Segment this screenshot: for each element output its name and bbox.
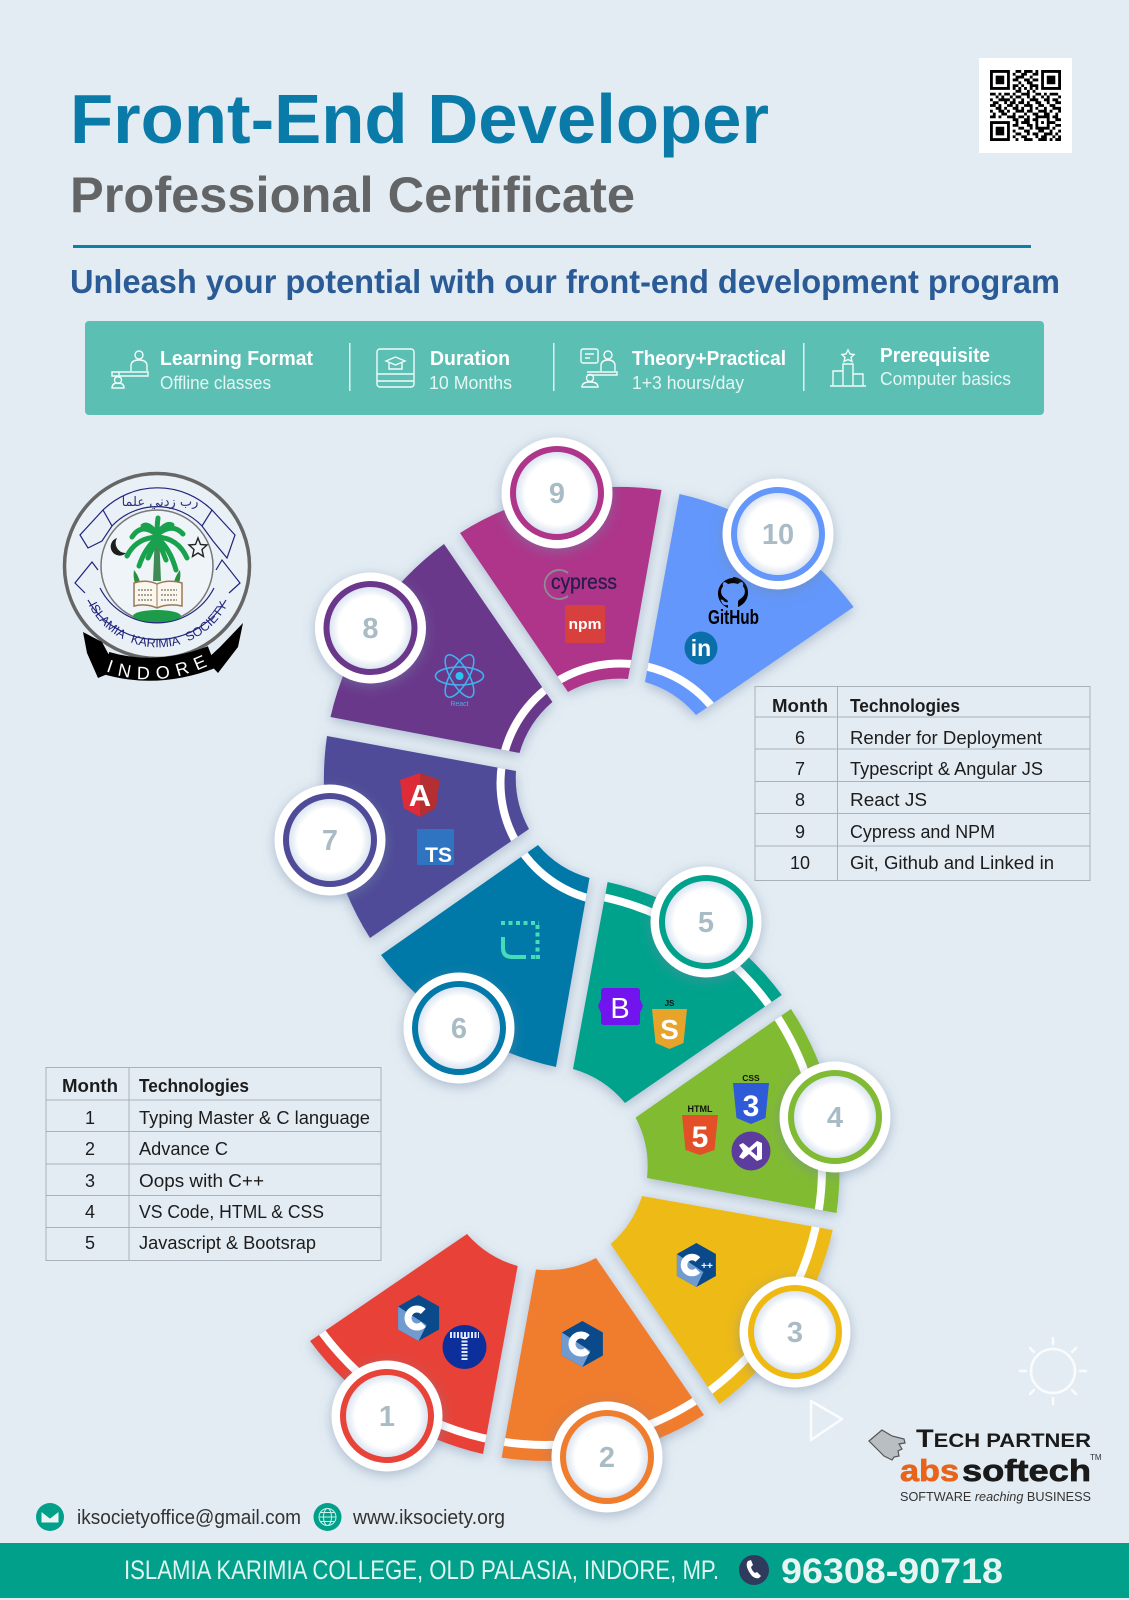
icon: course book (377, 349, 414, 387)
learning format text: Learning Format (160, 348, 313, 370)
table: months 6 to 10 (755, 686, 1090, 880)
circle badge 3: 3 (787, 1317, 803, 1349)
logo ring text: ISLAMIA KARIMIA SOCIETY (89, 600, 226, 648)
contact: website: www.iksociety.org (352, 1507, 505, 1529)
duration text: 10 Months (429, 373, 512, 393)
icon: HTML5 (682, 1104, 718, 1155)
table: months 6 to 10: Cypress and NPM (850, 822, 995, 842)
circle badge 6: 6 (451, 1013, 467, 1045)
abs softech wordmark: softech (962, 1453, 1091, 1488)
theory and practical text: Theory+Practical (632, 348, 786, 370)
circle badge 8 (315, 572, 426, 684)
segment 7 (318, 734, 532, 944)
segment 6 (378, 845, 594, 1074)
footer bar (0, 1543, 1129, 1598)
icon: play triangle decoration (811, 1401, 842, 1440)
contact: website (314, 1503, 505, 1531)
theory and practical text (632, 348, 786, 393)
circle badge 5: 5 (698, 907, 714, 939)
logo: Islamia Karimia Society (62, 472, 252, 681)
logo banner (83, 623, 243, 681)
table: months 6 to 10: 6 (795, 728, 805, 748)
info bar: program facts (85, 321, 1044, 415)
icon: Angular (400, 773, 440, 817)
circle badge 10: 10 (762, 519, 794, 551)
circle badge 9 (502, 438, 612, 548)
circle badge 1 (332, 1360, 442, 1472)
logo palm (111, 518, 207, 622)
circle badge 4: 4 (827, 1102, 843, 1134)
icon: Angular: A (409, 778, 431, 813)
logo motto: رب زدني علما (122, 495, 198, 510)
icon: CSS3: 3 (743, 1090, 759, 1123)
circle badge 2 (552, 1402, 662, 1512)
icon: C language month 2 (562, 1321, 603, 1367)
icon: TypeScript: TS (425, 844, 452, 867)
duration text: Duration (430, 348, 510, 370)
table: months 1 to 5: 2 (85, 1139, 95, 1159)
table: months 1 to 5: Month (62, 1076, 118, 1096)
table: months 6 to 10: Month (772, 696, 828, 716)
icon: CSS3: CSS (742, 1073, 760, 1083)
table: months 1 to 5: 5 (85, 1233, 95, 1253)
icon: TypeScript (417, 829, 454, 867)
table: months 6 to 10: React JS (850, 790, 927, 810)
table: months 6 to 10: Render for Deployment (850, 728, 1042, 748)
segment 4 (632, 1009, 846, 1220)
icon: learner at desk (112, 351, 148, 388)
subtitle: Professional Certificate (70, 167, 635, 223)
icon: GitHub (708, 577, 759, 629)
icon: npm: npm (568, 616, 602, 633)
table: months 6 to 10: 7 (795, 759, 805, 779)
table: months 1 to 5 (46, 1068, 381, 1260)
tech partner label: TECH PARTNER (916, 1425, 1091, 1453)
icon: LinkedIn (684, 632, 718, 664)
segment 1 (308, 1234, 522, 1461)
icon: C++: ++ (701, 1261, 713, 1272)
table: months 1 to 5: Javascript & Bootsrap (139, 1233, 316, 1253)
table: months 1 to 5: VS Code, HTML & CSS (139, 1202, 324, 1222)
prerequisite text (880, 345, 1011, 389)
icon: npm (565, 605, 605, 643)
segment 2 (497, 1258, 706, 1470)
duration text (429, 348, 512, 393)
college address: ISLAMIA KARIMIA COLLEGE, OLD PALASIA, INDORE, MP. (124, 1555, 719, 1585)
icon: GitHub: GitHub (708, 607, 759, 629)
icon: theory and practical (581, 349, 617, 387)
icon: C language month 1 (398, 1295, 439, 1341)
roadmap: upper and lower fan of ten months (268, 438, 890, 1512)
icon: sun decoration (1020, 1338, 1086, 1404)
segment 3 (608, 1194, 837, 1410)
abs softech wordmark: TM (1090, 1453, 1102, 1462)
learning format text: Offline classes (160, 373, 271, 393)
phone number: 96308-90718 (781, 1552, 1003, 1591)
table: months 1 to 5: Advance C (139, 1139, 228, 1159)
table: months 1 to 5: 1 (85, 1108, 95, 1128)
circle badge 9: 9 (549, 478, 565, 510)
prerequisite text: Computer basics (880, 369, 1011, 389)
circle badge 7 (274, 784, 386, 896)
icon: HTML5: 5 (692, 1121, 708, 1154)
table: months 6 to 10: 8 (795, 790, 805, 810)
icon: HTML5: HTML (688, 1104, 713, 1114)
abs softech wordmark: abs (900, 1453, 959, 1488)
circle badge 6 (404, 972, 514, 1084)
table: months 6 to 10: Typescript & Angular JS (850, 759, 1043, 779)
table: months 6 to 10: 10 (790, 853, 810, 873)
table: months 6 to 10: Git, Github and Linked in (850, 853, 1054, 873)
segment 10 (640, 493, 856, 721)
icon: podium with star (830, 350, 866, 386)
circle badge 5 (650, 866, 762, 978)
tech partner slogan: SOFTWARE reaching BUSINESS (900, 1489, 1091, 1504)
theory and practical text: 1+3 hours/day (632, 373, 744, 393)
icon: Visual Studio Code (732, 1132, 770, 1170)
segment 8 (326, 544, 556, 760)
icon: cypress: cypress (551, 571, 617, 594)
segment 9 (458, 484, 666, 698)
circle badge 10 (722, 478, 834, 590)
tech partner logo (869, 1425, 1102, 1504)
icon: cypress (545, 570, 617, 599)
contact: email (36, 1503, 301, 1531)
circle badge 3 (740, 1276, 850, 1388)
circle badge 7: 7 (322, 825, 338, 857)
title: Front-End Developer (70, 80, 769, 158)
icon: CSS3 (733, 1073, 769, 1124)
QR code (979, 58, 1072, 153)
icon: JavaScript (652, 999, 687, 1049)
circle badge 1: 1 (379, 1401, 395, 1433)
circle badge 4 (780, 1062, 890, 1172)
table: months 1 to 5: Typing Master & C language (139, 1108, 370, 1128)
logo banner: INDORE (107, 655, 207, 680)
tagline: Unleash your potential with our front-end development program (70, 263, 1060, 300)
circle badge 2: 2 (599, 1442, 615, 1474)
icon: React: React (450, 701, 469, 708)
table: months 1 to 5: Oops with C++ (139, 1171, 264, 1191)
prerequisite text: Prerequisite (880, 345, 990, 367)
segment 5 (568, 881, 784, 1109)
icon: JavaScript: S (660, 1014, 679, 1045)
icon: JavaScript: JS (665, 999, 675, 1008)
icon: C++ (677, 1243, 716, 1287)
table: months 1 to 5: 3 (85, 1171, 95, 1191)
circle badge 8: 8 (362, 613, 379, 645)
icon: React (436, 651, 484, 708)
icon: pointing hand (869, 1430, 905, 1460)
learning format text (160, 348, 313, 393)
table: months 1 to 5: Technologies (139, 1076, 249, 1096)
icon: LinkedIn: in (691, 635, 711, 661)
icon: Bootstrap: B (610, 993, 630, 1025)
icon: Typing Master (442, 1325, 486, 1369)
abs softech wordmark (900, 1453, 1102, 1488)
icon: Bootstrap (598, 988, 643, 1025)
icon: Render (501, 923, 540, 959)
contact: email: iksocietyoffice@gmail.com (77, 1507, 301, 1529)
table: months 6 to 10: Technologies (850, 696, 960, 716)
icon: phone (739, 1555, 769, 1585)
table: months 1 to 5: 4 (85, 1202, 95, 1222)
table: months 6 to 10: 9 (795, 822, 805, 842)
